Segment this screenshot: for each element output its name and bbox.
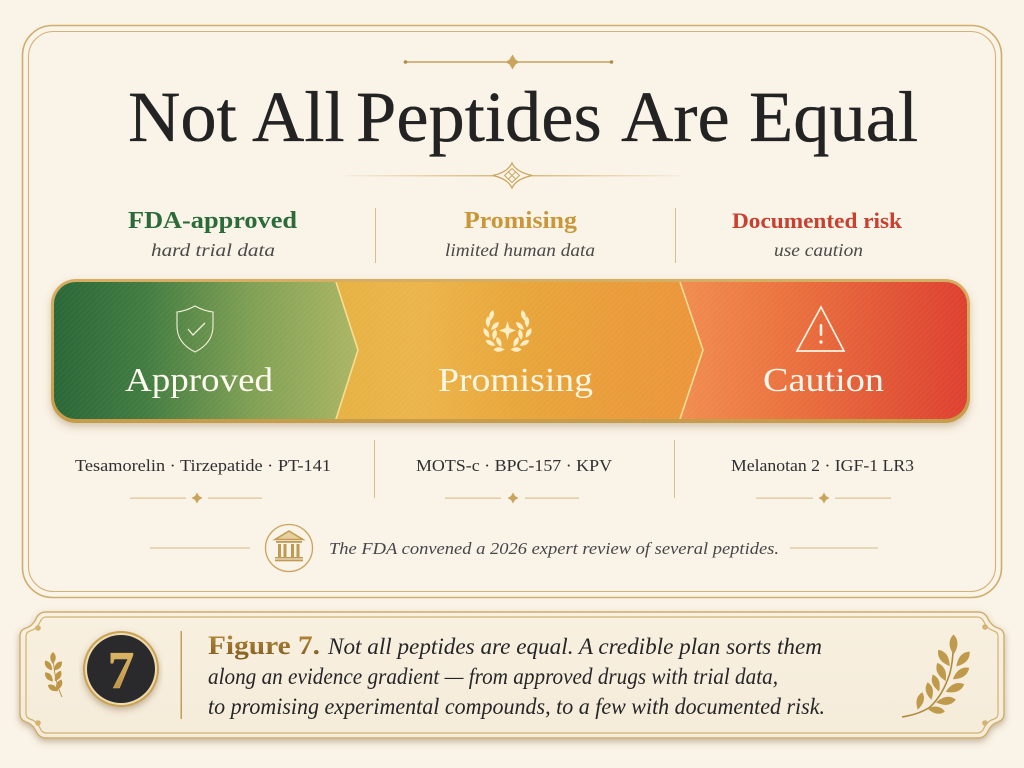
panel: figure caption plaque (20, 612, 1004, 738)
segment: approved (54, 282, 358, 419)
note rule right (790, 548, 878, 549)
title: Not (128, 76, 237, 157)
note rule left (150, 548, 250, 549)
note text: The FDA convened a 2026 expert review of several peptides. (329, 539, 779, 558)
tier header: FDA-approved: FDA-approved (128, 208, 298, 234)
title: All (252, 76, 345, 157)
compound list: promising: MOTS-c · BPC-157 · KPV (416, 456, 613, 475)
tier header: Documented risk: Documented risk (732, 208, 903, 233)
icon: warning triangle (797, 307, 844, 351)
tier header: Documented risk: use caution (774, 240, 863, 260)
caption text: Figure 7. (208, 631, 320, 660)
caption text: Not all peptides are equal. A credible plan sorts them (327, 634, 822, 659)
tier header: Documented risk (732, 208, 903, 260)
segment: promising (336, 282, 703, 419)
title: Equal (749, 76, 918, 157)
tier header: FDA-approved (128, 208, 298, 260)
icon: shield with check (177, 306, 213, 352)
left branch of wreath (482, 310, 504, 352)
label: Approved: Approved (125, 362, 273, 399)
icon: small laurel sprig (43, 652, 64, 697)
badge: figure number 7 (83, 631, 159, 707)
panel: main framed card (22, 26, 1002, 598)
caption text (208, 631, 825, 719)
icon: institution building (266, 524, 312, 572)
right branch of wreath (510, 310, 533, 352)
evidence gradient bar (51, 279, 970, 423)
tier header: FDA-approved: hard trial data (151, 240, 275, 260)
segment: caution (680, 282, 967, 419)
title: Peptides (356, 76, 602, 157)
title ornament (345, 163, 680, 188)
tier header: Promising (445, 208, 595, 260)
small ornament: caution (756, 492, 891, 504)
caption text: to promising experimental compounds, to a few with documented risk. (208, 694, 825, 719)
tier header: Promising: limited human data (445, 240, 595, 260)
badge: figure number 7: 7 (108, 642, 134, 700)
tier header: Promising: Promising (464, 208, 577, 234)
top ornament (404, 54, 613, 70)
compound list: caution: Melanotan 2 · IGF-1 LR3 (731, 456, 914, 475)
label: Promising: Promising (438, 362, 593, 399)
icon: laurel wreath with star (482, 310, 533, 352)
small ornament: approved (130, 492, 262, 504)
title: Are (621, 76, 730, 157)
small ornament: promising (445, 492, 579, 504)
label: Caution: Caution (763, 362, 884, 399)
caption text: along an evidence gradient — from approved drugs with trial data, (208, 664, 778, 689)
icon: large laurel branch (902, 634, 973, 717)
compound list: approved: Tesamorelin · Tirzepatide · PT-141 (75, 456, 331, 475)
